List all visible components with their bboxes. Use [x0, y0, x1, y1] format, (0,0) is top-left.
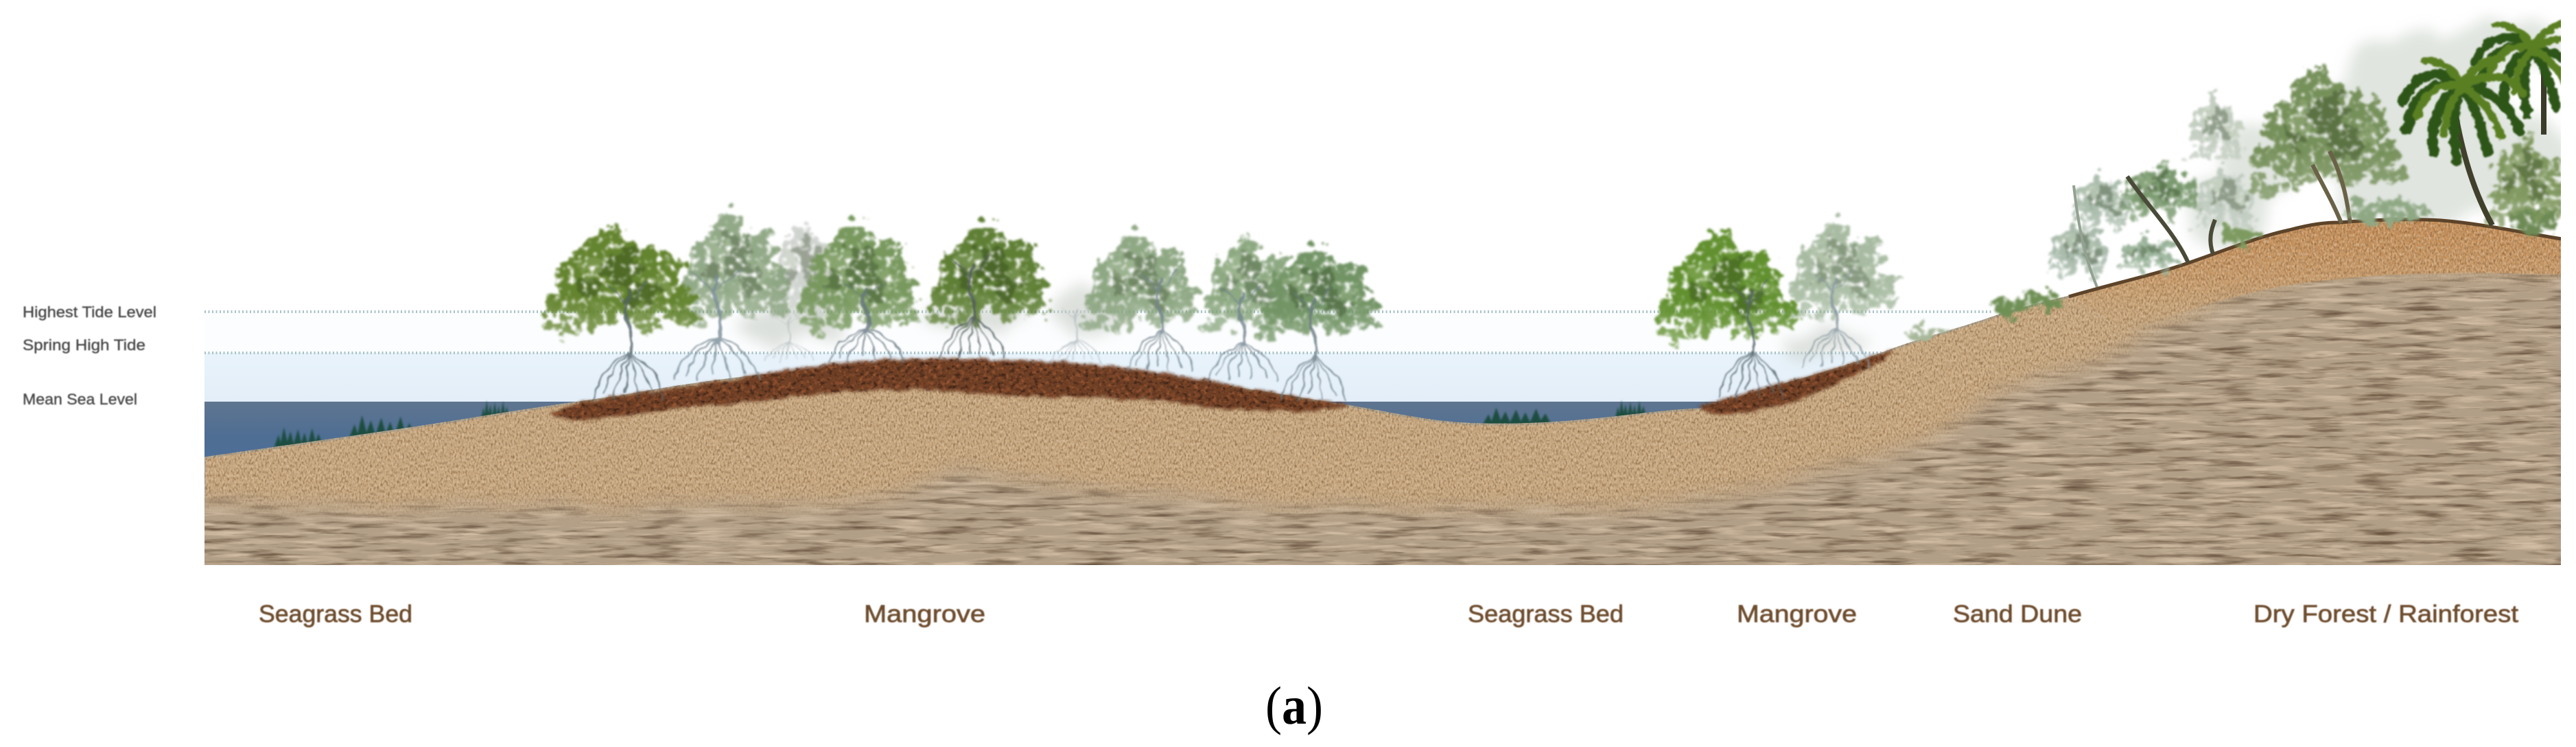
- mangrove tree 8: [1654, 234, 1799, 398]
- sea below mean sea level: [204, 402, 1721, 457]
- seagrass clump 1: [274, 427, 326, 447]
- ghost mangrove 2: [1052, 306, 1101, 363]
- dashed tide lines: [204, 312, 1991, 353]
- label: mangrove right: Mangrove: [1737, 601, 1857, 628]
- seagrass clump 5: [1615, 400, 1648, 417]
- mangrove tree 6: [1199, 235, 1302, 381]
- label: dry forest / rainforest: Dry Forest / Rainforest: [2253, 601, 2518, 628]
- mangrove mud mound 2: [1697, 349, 1893, 414]
- dry forest trees: left group: [2048, 161, 2258, 287]
- mangrove tree 5: [1080, 231, 1199, 371]
- sand and substrate ground: [204, 220, 2561, 565]
- mangrove tree 4: [926, 223, 1051, 359]
- dry forest tree: central broadleaf: [2189, 70, 2405, 223]
- orange topsoil layer: [2072, 220, 2566, 330]
- zone labels along the bottom: [259, 601, 2518, 628]
- dark soil crust on ridge: [2069, 220, 2566, 297]
- seagrass clump 4: [1482, 408, 1552, 424]
- figure caption (a): (a): [1265, 676, 1323, 735]
- label: seagrass bed centre: Seagrass Bed: [1468, 601, 1624, 628]
- label: sand dune: Sand Dune: [1953, 601, 2082, 628]
- panel: cross-section illustration: [172, 18, 2576, 604]
- mangrove tree 1: [541, 229, 700, 400]
- label: mean sea level: Mean Sea Level: [23, 391, 137, 408]
- mangrove tree 7: [1256, 247, 1381, 401]
- tidal zone: spring tide to mean sea level: [204, 353, 2057, 402]
- seagrass clump 3: [480, 400, 509, 416]
- bedrock layer: [172, 270, 2576, 604]
- mangrove mud mound 1: [552, 358, 1347, 420]
- ghost mangrove 1: [765, 217, 842, 361]
- palm tree 1: [2403, 58, 2522, 225]
- seagrass clump 2: [349, 415, 412, 437]
- dune shrubs: [1909, 290, 2066, 341]
- misty rainforest background: [2186, 18, 2566, 254]
- understory shrubs on ridge: [2220, 199, 2560, 246]
- mangrove tree 3: [797, 222, 920, 361]
- label: highest tide level: Highest Tide Level: [23, 303, 156, 321]
- tidal zone: highest tide to spring tide: [204, 312, 1991, 353]
- tide level labels: [23, 303, 156, 408]
- label: spring high tide: Spring High Tide: [23, 336, 145, 354]
- label: seagrass bed left: Seagrass Bed: [259, 601, 412, 628]
- ghost foliage band: [741, 286, 1866, 357]
- mangrove tree 2: [674, 209, 791, 381]
- palm tree 2: [2475, 23, 2576, 135]
- lower right tree: [2486, 133, 2568, 225]
- label: mangrove left: Mangrove: [864, 601, 985, 628]
- mangrove tree 9: [1784, 219, 1897, 367]
